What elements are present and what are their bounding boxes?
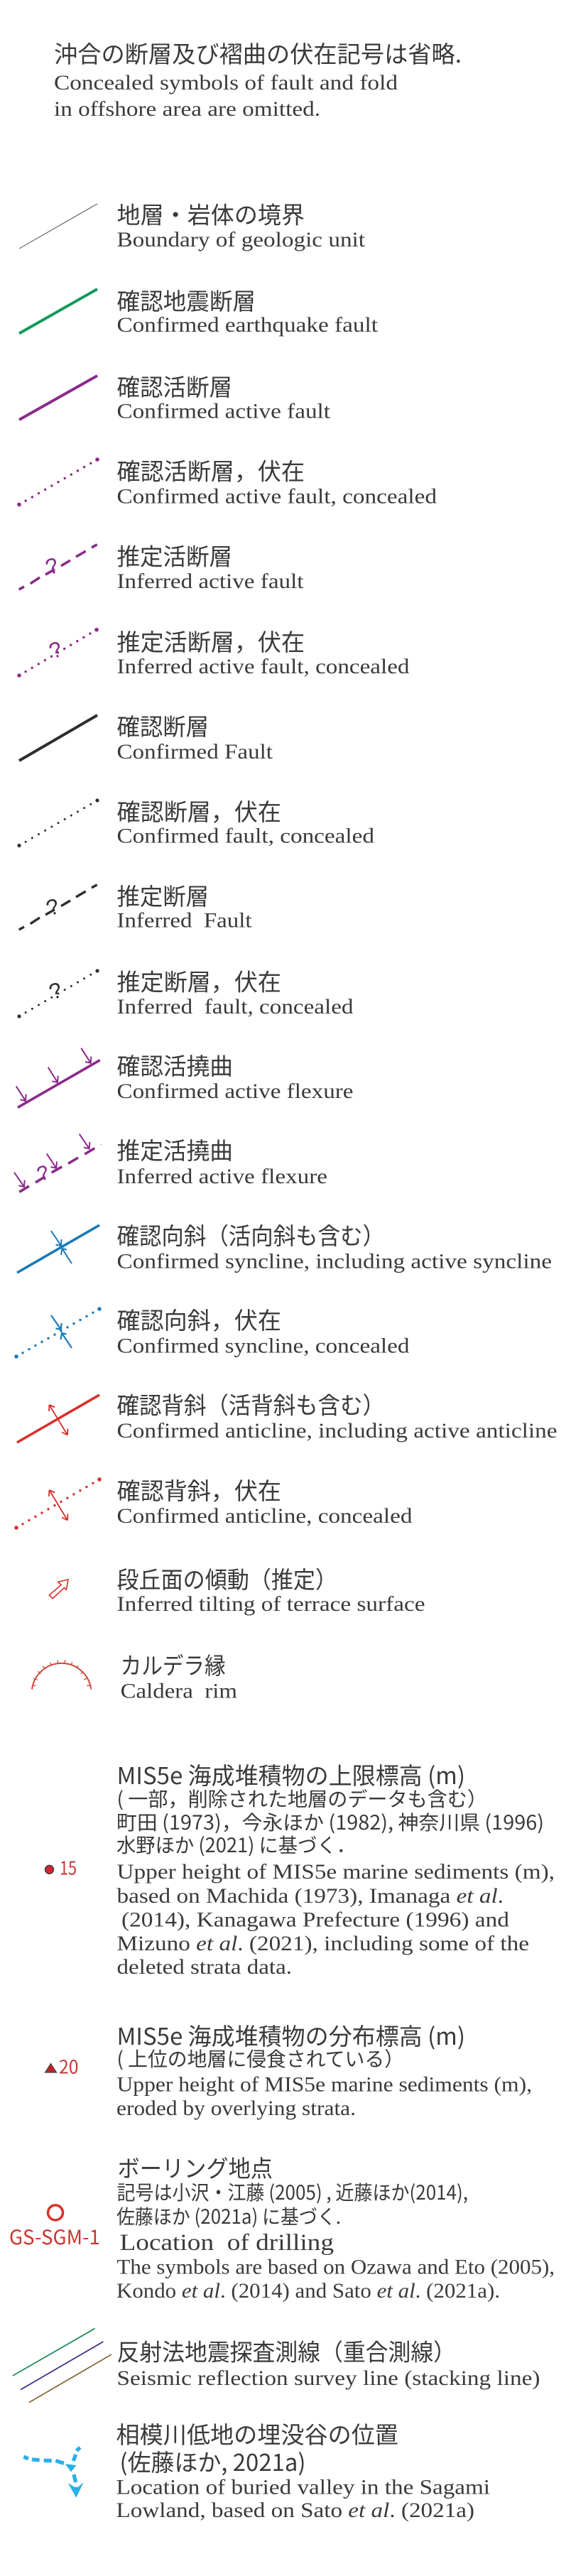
label: inferred fault: 推定断層: [116, 878, 209, 912]
label: MIS5e upper height: [116, 1757, 555, 1979]
label: confirmed active fault concealed: Confirmed active fault, concealed: [116, 484, 437, 509]
label: inferred active fault: Inferred active fault: [116, 570, 304, 593]
icon: blue line with converging arrows: [17, 1225, 99, 1273]
label: caldera rim: [121, 1647, 237, 1703]
label: confirmed anticline: 確認背斜（活背斜も含む）: [116, 1386, 385, 1420]
icon: green solid line: [19, 289, 97, 334]
label: MIS5e distribution height: MIS5e 海成堆積物の分布標高 (m): [116, 2018, 465, 2052]
label: MIS5e upper height: deleted strata data.: [116, 1955, 292, 1979]
label: inferred active flexure: [116, 1132, 327, 1188]
label: MIS5e upper height: (2014), Kanagawa Prefecture (1996) and: [121, 1908, 509, 1932]
icon: black dashed line with question mark: ?: [43, 893, 62, 921]
icon: black dotted line with question mark: ?: [45, 977, 65, 1005]
label: confirmed anticline concealed: 確認背斜，伏在: [116, 1472, 281, 1506]
label: inferred fault concealed: [116, 963, 354, 1018]
note: concealed symbols omitted: 沖合の断層及び褶曲の伏在記号は省略.: [54, 36, 462, 70]
icon: thin boundary line: [19, 204, 97, 249]
label: buried valley: 相模川低地の埋没谷の位置: [116, 2416, 398, 2450]
label: earthquake fault: [116, 283, 379, 337]
label: drilling: Location of drilling: [119, 2230, 334, 2256]
icon: three coloured survey lines: [13, 2328, 112, 2403]
label: MIS5e upper height: Mizuno et al. (2021), including some of the: [116, 1932, 529, 1955]
label: confirmed syncline: 確認向斜（活向斜も含む）: [116, 1217, 385, 1251]
label: drilling: 記号は小沢・江藤 (2005) , 近藤ほか(2014),: [116, 2178, 468, 2206]
label: earthquake fault: Confirmed earthquake fault: [116, 313, 379, 337]
label: confirmed active flexure: [116, 1048, 353, 1103]
legend item: confirmed active fault: [19, 369, 331, 423]
label: inferred active fault concealed: Inferred active fault, concealed: [116, 655, 409, 678]
label: confirmed fault: Confirmed Fault: [116, 740, 273, 763]
label: boundary: 地層・岩体の境界: [116, 196, 305, 230]
legend item: inferred active fault: [19, 538, 304, 593]
label: confirmed fault: 確認断層: [116, 708, 209, 742]
label: MIS5e distribution height: Upper height of MIS5e marine sediments (m),: [116, 2072, 532, 2097]
legend item: confirmed active fault, concealed: [17, 453, 437, 509]
icon: purple dotted line with question mark: ?: [45, 636, 65, 664]
label: confirmed fault concealed: [116, 793, 374, 848]
label: confirmed fault: [116, 708, 273, 763]
label: drilling: 佐藤ほか (2021a) に基づく.: [116, 2202, 341, 2230]
label: seismic survey: [116, 2334, 540, 2390]
label: boundary: [116, 196, 366, 251]
icon: blue dotted line with converging arrows: [14, 1307, 102, 1359]
label: confirmed active fault concealed: [116, 453, 437, 509]
legend item: confirmed anticline, concealed: [14, 1472, 412, 1530]
label: confirmed anticline concealed: [116, 1472, 412, 1528]
label: confirmed active fault: [116, 369, 331, 423]
label: confirmed anticline concealed: Confirmed anticline, concealed: [116, 1504, 412, 1528]
legend item: seismic reflection survey line: [13, 2328, 540, 2403]
icon: red circle with value 15: [45, 1854, 77, 1881]
legend item: inferred active fault, concealed: [17, 624, 409, 678]
legend item: confirmed anticline: [17, 1386, 557, 1442]
icon: purple dashed line with arrows and question mark: [14, 1134, 102, 1192]
legend item: MIS5e sediments eroded by overlying strata: [45, 2018, 532, 2120]
legend item: confirmed syncline, concealed: [14, 1302, 409, 1359]
label: inferred fault concealed: 推定断層，伏在: [116, 963, 281, 997]
legend item: confirmed fault: [19, 708, 273, 763]
note: concealed symbols omitted: [54, 36, 462, 121]
legend item: caldera rim: [32, 1647, 237, 1703]
label: buried valley: [116, 2416, 490, 2522]
icon: purple line with arrows: [16, 1048, 100, 1107]
icon: purple dotted line: [17, 457, 99, 506]
label: confirmed active fault concealed: 確認活断層，伏在: [116, 453, 305, 487]
label: confirmed active fault: Confirmed active fault: [116, 399, 331, 423]
legend item: buried valley in the Sagami Lowland: [23, 2416, 490, 2522]
label: confirmed anticline: [116, 1386, 557, 1442]
icon: red dotted line with diverging arrows: [14, 1477, 102, 1530]
icon: red circle with value 15: 15: [60, 1854, 77, 1881]
label: MIS5e upper height: based on Machida (1973), Imanaga et al.: [116, 1884, 504, 1908]
icon: black dotted line: [17, 798, 99, 847]
label: drilling: ボーリング地点: [118, 2150, 273, 2184]
label: confirmed anticline: Confirmed anticline, including active anticline: [116, 1419, 557, 1442]
legend item: boundary of geologic unit: [19, 196, 366, 251]
label: drilling: [116, 2150, 555, 2303]
icon: red arc with ticks: [32, 1660, 91, 1689]
label: seismic survey: Seismic reflection survey line (stacking line): [116, 2366, 540, 2390]
label: buried valley: (佐藤ほか, 2021a): [119, 2444, 305, 2478]
icon: hollow red arrow: [49, 1580, 68, 1599]
label: tilting: [116, 1561, 425, 1616]
note: concealed symbols omitted: Concealed symbols of fault and fold: [54, 71, 398, 94]
label: MIS5e distribution height: eroded by overlying strata.: [116, 2097, 356, 2120]
label: confirmed active flexure: 確認活撓曲: [116, 1048, 233, 1082]
label: MIS5e distribution height: [116, 2018, 532, 2120]
icon: red triangle with value 20: 20: [59, 2053, 78, 2080]
icon: red circle with drilling name: [9, 2205, 100, 2251]
label: inferred active fault: [116, 538, 304, 593]
label: inferred active fault: 推定活断層: [116, 538, 232, 572]
label: confirmed syncline: [116, 1217, 552, 1273]
label: MIS5e upper height: 水野ほか (2021) に基づく．: [116, 1830, 356, 1859]
label: tilting: Inferred tilting of terrace surface: [116, 1592, 425, 1616]
label: MIS5e upper height: 町田 (1973)，今永ほか (1982), 神奈川県 (1996): [116, 1808, 544, 1836]
label: buried valley: Location of buried valley in the Sagami: [116, 2476, 490, 2499]
label: caldera rim: Caldera rim: [121, 1679, 237, 1703]
label: drilling: The symbols are based on Ozawa and Eto (2005),: [116, 2256, 555, 2278]
label: caldera rim: カルデラ縁: [121, 1647, 226, 1681]
label: confirmed fault concealed: Confirmed fault, concealed: [116, 825, 374, 848]
label: inferred fault: Inferred Fault: [116, 909, 252, 932]
icon: black dashed line with question mark: [19, 885, 97, 930]
icon: purple dotted line with question mark: [17, 628, 99, 678]
label: buried valley: Lowland, based on Sato et al. (2021a): [116, 2499, 474, 2522]
icon: purple dashed line with question mark: [19, 545, 97, 589]
label: drilling: Kondo et al. (2014) and Sato et al. (2021a).: [116, 2279, 500, 2303]
label: MIS5e upper height: ( 一部，削除された地層のデータも含む）: [116, 1784, 487, 1813]
label: earthquake fault: 確認地震断層: [116, 283, 256, 317]
label: tilting: 段丘面の傾動（推定）: [116, 1561, 337, 1595]
label: confirmed active fault: 確認活断層: [116, 369, 232, 403]
legend item: inferred fault: [19, 878, 252, 932]
label: inferred fault: [116, 878, 252, 932]
label: inferred fault concealed: Inferred fault, concealed: [116, 995, 354, 1018]
label: MIS5e upper height: Upper height of MIS5e marine sediments (m),: [116, 1860, 555, 1884]
label: confirmed syncline: Confirmed syncline, including active syncline: [116, 1250, 552, 1273]
icon: black solid line: [19, 715, 97, 761]
legend item: confirmed fault, concealed: [17, 793, 374, 848]
note: concealed symbols omitted: in offshore area are omitted.: [54, 97, 320, 121]
icon: red circle with drilling name: GS-SGM-1: [9, 2222, 100, 2251]
legend item: location of drilling: [9, 2150, 555, 2303]
icon: red line with diverging arrows: [17, 1395, 99, 1442]
legend item: inferred tilting of terrace surface: [49, 1561, 425, 1616]
label: inferred active flexure: Inferred active flexure: [116, 1165, 327, 1188]
legend item: inferred fault, concealed: [17, 963, 354, 1018]
icon: purple dashed line with arrows and question mark: ?: [34, 1161, 53, 1186]
label: confirmed syncline concealed: [116, 1302, 409, 1358]
icon: purple dashed line with question mark: ?: [42, 553, 62, 580]
label: inferred active flexure: 推定活撓曲: [116, 1132, 233, 1166]
label: MIS5e upper height: MIS5e 海成堆積物の上限標高 (m): [116, 1757, 465, 1791]
label: MIS5e distribution height: ( 上位の地層に侵食されている）: [116, 2044, 404, 2072]
icon: cyan dashed branching arrow: [23, 2447, 84, 2498]
label: boundary: Boundary of geologic unit: [116, 228, 366, 251]
icon: red triangle with value 20: [45, 2053, 78, 2080]
label: confirmed syncline concealed: Confirmed syncline, concealed: [116, 1335, 409, 1358]
icon: black dotted line with question mark: [17, 969, 99, 1018]
legend item: upper height of MIS5e marine sediments: [45, 1757, 555, 1979]
label: inferred active fault concealed: [116, 624, 409, 678]
legend item: confirmed earthquake fault: [19, 283, 379, 337]
label: seismic survey: 反射法地震探査測線（重合測線）: [116, 2334, 456, 2368]
label: inferred active fault concealed: 推定活断層，伏在: [116, 624, 305, 658]
legend item: confirmed active flexure: [16, 1048, 353, 1107]
label: confirmed syncline concealed: 確認向斜，伏在: [116, 1302, 281, 1336]
label: confirmed active flexure: Confirmed active flexure: [116, 1080, 353, 1103]
icon: purple solid line: [19, 376, 97, 420]
label: confirmed fault concealed: 確認断層，伏在: [116, 793, 281, 827]
legend item: confirmed syncline: [17, 1217, 552, 1273]
legend item: inferred active flexure: [14, 1132, 327, 1192]
